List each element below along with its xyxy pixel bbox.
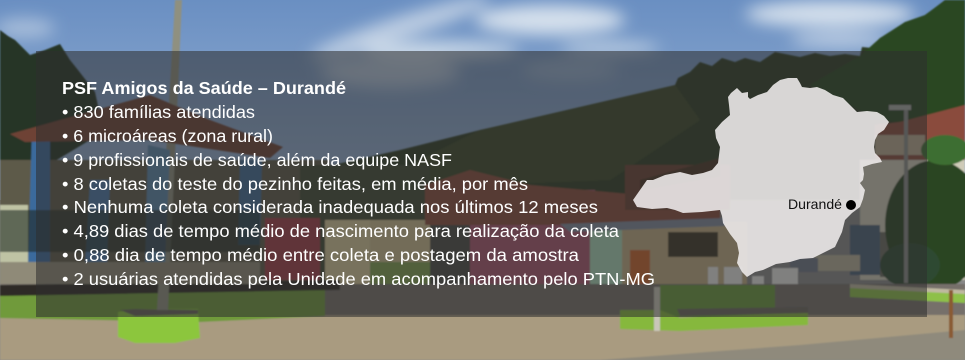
fact: time to posting: • 0,88 dia de tempo médio entre coleta e postagem da amostra — [62, 245, 579, 265]
fact: micro-areas: • 6 microáreas (zona rural) — [62, 126, 273, 146]
fact: monthly collections: • 8 coletas do teste do pezinho feitas, em média, por mês — [62, 174, 528, 194]
map of Minas Gerais — [633, 78, 889, 277]
fact: time from birth: • 4,89 dias de tempo médio de nascimento para realização da coleta — [62, 221, 619, 241]
heading: PSF Amigos da Saúde – Durandé — [62, 78, 346, 98]
fact: families: • 830 famílias atendidas — [62, 102, 255, 122]
translucent dark panel — [36, 51, 927, 317]
fact: inadequate collections: • Nenhuma coleta considerada inadequada nos últimos 12 meses — [62, 197, 598, 217]
map label: Durandé: Durandé — [788, 196, 842, 212]
text block: unit facts — [62, 78, 655, 289]
fact: monitored users: • 2 usuárias atendidas pela Unidade em acompanhamento pelo PTN-MG — [62, 269, 655, 289]
fact: professionals: • 9 profissionais de saúde, além da equipe NASF — [62, 150, 452, 170]
